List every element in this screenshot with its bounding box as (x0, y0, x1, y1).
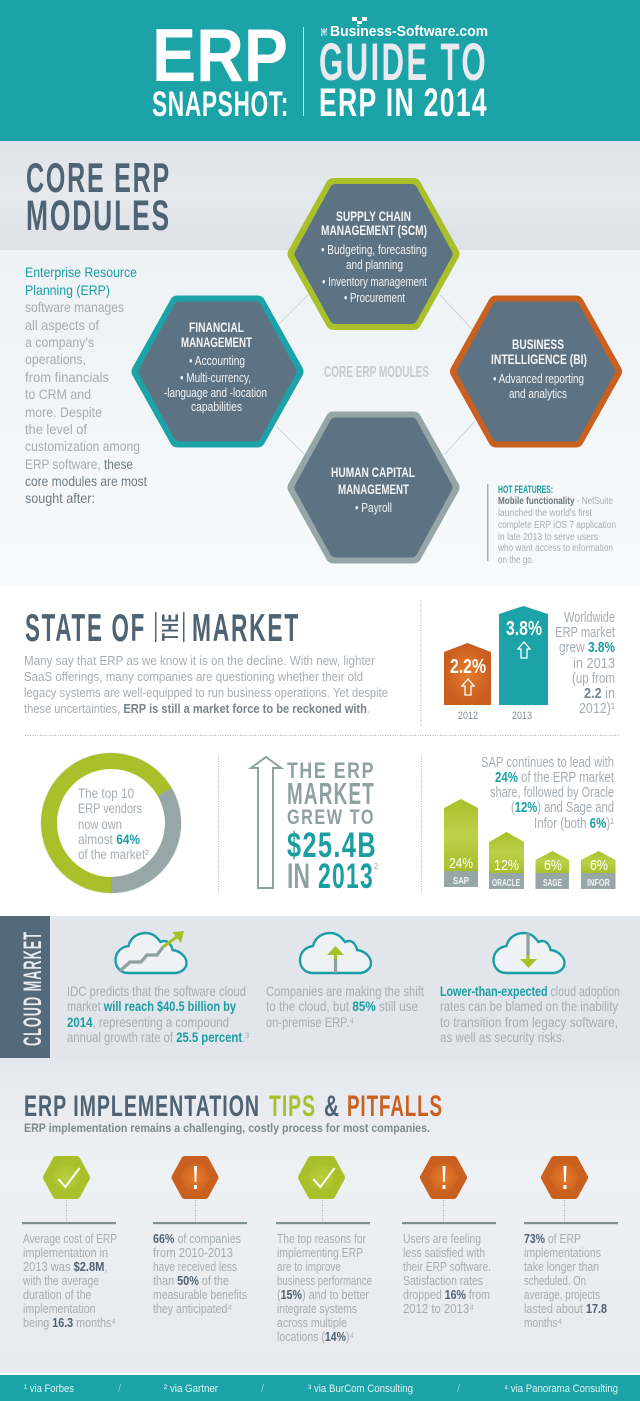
callout: market grew to 25.4B: IN (287, 857, 310, 896)
hexagon: financial management (140, 304, 296, 440)
donut chart: top 10 vendors 64%: of the market² (78, 846, 149, 862)
pitfall: user satisfaction: Satisfaction rates (403, 1274, 483, 1288)
callout: market grew to 25.4B: $25.4B (287, 826, 377, 865)
heading: state of the market: STATE OF (25, 607, 146, 650)
donut chart: top 10 vendors 64% (40, 752, 182, 894)
hexagon: business intelligence: • Advanced reporting (493, 371, 584, 386)
pitfall: measurable benefits: from 2010-2013 (153, 1246, 233, 1260)
bar: Sage: 6% (544, 857, 562, 874)
text block: IDC prediction: market will reach $40.5 billion by (67, 998, 236, 1014)
bar chart: ERP market growth (444, 606, 616, 722)
tip: reasons for implementing: implementing ERP (277, 1246, 363, 1260)
text block: low adoption: Lower-than-expected cloud adoption (440, 983, 620, 999)
heading: cloud market: CLOUD MARKET (19, 931, 47, 1046)
tip: reasons for implementing: are to improve (277, 1260, 341, 1274)
footer: sources: ² via Gartner (164, 1383, 218, 1395)
callout: hot features: launched the world's first (498, 508, 592, 519)
logo: Business-Software.com: Business-Software.com (330, 23, 488, 40)
hexagon: business intelligence (458, 304, 614, 440)
bar: Infor: INFOR (587, 878, 611, 889)
text block: IDC prediction: 2014, representing a compound (67, 1014, 229, 1030)
text block: ERP intro: all aspects of (25, 317, 99, 333)
text block: market intro: SaaS offerings, many companies are questioning whether their old (24, 669, 363, 684)
text block: ERP intro: customization among (25, 438, 140, 454)
hexagon: financial management: -language and -location (164, 385, 267, 400)
text block: ERP intro: operations, (25, 351, 86, 367)
arrow: market growth (251, 757, 281, 888)
bar: 2013 (499, 606, 548, 722)
tip: reasons for implementing: (15%) and to better (277, 1288, 369, 1302)
hexagon: supply chain management: MANAGEMENT (SCM) (321, 222, 427, 238)
footer: sources: ¹ via Forbes (24, 1383, 74, 1395)
bar: Sage (536, 851, 569, 889)
icon: cloud with down arrow (494, 933, 564, 973)
callout: hot features: complete ERP iOS 7 application (498, 520, 616, 531)
callout: hot features: who want access to information (497, 543, 613, 554)
title: ERP Snapshot: SNAPSHOT: (152, 85, 289, 124)
bar: Oracle (489, 832, 524, 889)
tip: average cost: implementation in (23, 1246, 108, 1260)
panel: state of the market (0, 585, 640, 917)
text block: market intro: Many say that ERP as we know it is on the decline. With new, lighter (24, 653, 376, 668)
tip: reasons for implementing: integrate systems (277, 1302, 357, 1316)
hexagon: financial management: • Accounting (189, 353, 245, 368)
hexagon: business intelligence: INTELLIGENCE (BI) (491, 351, 587, 367)
heading: state of the market: MARKET (192, 607, 300, 650)
logo: Business-Software.com (320, 17, 488, 40)
callout: hot features: on the go. (498, 555, 534, 566)
hexagon: financial management: MANAGEMENT (181, 334, 252, 350)
bar: Sage: SAGE (543, 878, 562, 889)
panel: core ERP modules (0, 141, 640, 585)
heading: core ERP modules: MODULES (26, 192, 171, 240)
pitfall: measurable benefits: than 50% of the (153, 1274, 229, 1288)
text block: ERP intro: core modules are most (25, 473, 147, 489)
pitfall: longer than scheduled: take longer than (524, 1260, 599, 1274)
text block: SAP market share: 24% of the ERP market (495, 769, 615, 786)
bar: SAP: 24% (449, 855, 473, 872)
text block: worldwide growth: grew 3.8% (559, 639, 615, 656)
bar: 2012: 2.2% (450, 656, 486, 678)
callout: market grew to 25.4B: 2 (374, 862, 378, 871)
bar: SAP (444, 799, 478, 887)
callout: market grew to 25.4B: THE ERP (287, 758, 375, 783)
text block: ERP intro: Planning (ERP) (25, 282, 110, 298)
pitfall: user satisfaction: Users are feeling (403, 1232, 481, 1246)
pitfall: longer than scheduled: months⁴ (524, 1316, 562, 1330)
text block: ERP intro: the level of (25, 421, 87, 437)
text block: worldwide growth (555, 609, 616, 717)
hexagon: financial management: capabilities (191, 399, 242, 414)
text block: market intro (24, 653, 388, 716)
subheading: ERP implementation remains a challenging, costly process for most companies. (24, 1121, 430, 1135)
callout: hot features: Mobile functionality - NetSuite (498, 496, 613, 507)
callout: market grew to 25.4B (287, 758, 378, 896)
pitfall: user satisfaction (402, 1160, 496, 1316)
text block: IDC prediction: IDC predicts that the software cloud (67, 983, 246, 999)
pitfall: longer than scheduled (524, 1160, 618, 1330)
heading: state of the market: THE (157, 613, 183, 641)
icon: cloud with up arrow (300, 933, 371, 973)
tip: average cost: being 16.3 months⁴ (23, 1316, 116, 1330)
text block: ERP intro: software manages (25, 299, 124, 315)
text block: ERP intro: ERP software, these (25, 456, 133, 472)
text block: ERP intro: from financials (25, 369, 109, 385)
pitfall: longer than scheduled: average, projects (524, 1288, 600, 1302)
pitfall: longer than scheduled: implementations (524, 1246, 601, 1260)
donut chart: top 10 vendors 64%: now own (78, 816, 122, 832)
hexagon: supply chain management: • Inventory management (322, 274, 427, 289)
text block: ERP intro: sought after: (25, 490, 95, 506)
bar: 2012 (444, 643, 491, 722)
text block: IDC prediction: annual growth rate of 25.5 percent.³ (67, 1029, 249, 1045)
tip: reasons for implementing: business performance (277, 1274, 372, 1288)
pitfall: measurable benefits: have received less (153, 1260, 237, 1274)
pitfall: longer than scheduled: scheduled. On (524, 1274, 586, 1288)
title: Guide to ERP in 2014: GUIDE TO (319, 33, 488, 92)
bar: 2012: 2012 (458, 710, 478, 722)
text block: shift to the cloud: on-premise ERP.⁴ (266, 1014, 354, 1030)
icon: cloud with rising chart (116, 931, 186, 973)
pitfall: user satisfaction: their ERP software. (403, 1260, 491, 1274)
donut chart: top 10 vendors 64%: ERP vendors (78, 800, 142, 816)
footer: sources: / (118, 1383, 122, 1395)
footer: sources: ⁴ via Panorama Consulting (504, 1383, 618, 1395)
pitfall: user satisfaction: dropped 16% from (403, 1288, 490, 1302)
pitfall: measurable benefits: measurable benefits (153, 1288, 247, 1302)
callout: hot features: in late 2013 to serve users (498, 532, 598, 543)
tip: reasons for implementing: locations (14%)⁴ (277, 1330, 354, 1344)
text block: worldwide growth: ERP market (555, 624, 616, 641)
bar: Oracle: 12% (494, 857, 519, 874)
callout: hot features: HOT FEATURES: (498, 484, 553, 496)
panel: cloud market (0, 916, 640, 1058)
pitfall: measurable benefits: 66% of companies (153, 1232, 241, 1246)
text block: worldwide growth: in 2013 (573, 655, 615, 672)
footer: sources: / (261, 1383, 265, 1395)
title: ERP Snapshot (152, 13, 289, 124)
tip: reasons for implementing: The top reasons for (277, 1232, 366, 1246)
text block: SAP market share: Infor (both 6%)¹ (534, 815, 614, 832)
bar: Infor: 6% (590, 857, 608, 874)
text block: ERP intro: to CRM and (25, 386, 91, 402)
hexagon: financial management: • Multi-currency, (180, 370, 251, 385)
text block: worldwide growth: (up from (572, 670, 615, 687)
hexagon: supply chain management: • Budgeting, forecasting (321, 242, 427, 257)
text block: shift to the cloud (266, 983, 424, 1030)
heading: tips and pitfalls: PITFALLS (347, 1090, 443, 1123)
tip: average cost: 2013 was $2.8M, (23, 1260, 108, 1274)
tip: average cost: implementation (23, 1302, 96, 1316)
donut chart: top 10 vendors 64%: almost 64% (78, 831, 140, 847)
panel: implementation tips and pitfalls (0, 1058, 640, 1374)
text block: ERP intro: Enterprise Resource (25, 264, 137, 280)
text block: ERP intro: a company's (25, 334, 94, 350)
footer: sources: ³ via BurCom Consulting (308, 1383, 413, 1395)
heading: tips and pitfalls: ERP IMPLEMENTATION (24, 1090, 260, 1123)
bar: Infor (581, 851, 616, 889)
tip: average cost (22, 1160, 117, 1330)
callout: market grew to 25.4B: GREW TO (287, 806, 375, 829)
tip: average cost: with the average (22, 1274, 99, 1288)
hexagon: supply chain management (296, 186, 452, 322)
text block: ERP intro (25, 264, 147, 506)
pitfall: longer than scheduled: 73% of ERP (524, 1232, 581, 1246)
text block: IDC prediction (67, 983, 249, 1045)
hexagon: human capital management: • Payroll (355, 500, 392, 515)
tip: average cost: duration of the (23, 1288, 92, 1302)
pitfall: longer than scheduled: lasted about 17.8 (524, 1302, 607, 1316)
bar: Oracle: ORACLE (492, 878, 520, 889)
hexagon: supply chain management: and planning (346, 257, 403, 272)
text block: worldwide growth: Worldwide (564, 609, 615, 626)
label: core ERP modules: CORE ERP MODULES (324, 364, 429, 381)
hexagon: financial management: FINANCIAL (189, 319, 244, 335)
callout: market grew to 25.4B: MARKET (287, 776, 375, 811)
bar chart: vendor market share (444, 799, 616, 889)
heading: core ERP modules: CORE ERP (26, 154, 171, 201)
text block: shift to the cloud: Companies are making the shift (266, 983, 424, 999)
callout: market grew to 25.4B: 2013 (318, 857, 374, 896)
donut chart: top 10 vendors 64%: The top 10 (78, 785, 134, 801)
hexagon: human capital management: HUMAN CAPITAL (331, 464, 415, 480)
title: ERP Snapshot: ERP (152, 13, 288, 97)
text block: low adoption: as well as security risks. (440, 1029, 565, 1045)
text block: market intro: legacy systems are well-equipped to run business operations. Yet despite (24, 685, 388, 700)
header banner (0, 0, 640, 141)
heading: tips and pitfalls: & (324, 1090, 339, 1123)
tip: average cost: Average cost of ERP (23, 1232, 117, 1246)
callout: hot features (487, 484, 616, 566)
title: Guide to ERP in 2014 (319, 33, 488, 125)
heading: core ERP modules (26, 154, 171, 240)
hexagon: human capital management: MANAGEMENT (338, 481, 409, 497)
text block: low adoption (440, 983, 620, 1045)
hexagon: business intelligence: and analytics (509, 386, 567, 401)
hexagon: business intelligence: BUSINESS (512, 336, 564, 352)
footer: sources: / (457, 1383, 461, 1395)
pitfall: measurable benefits (153, 1160, 247, 1316)
pitfall: user satisfaction: less satisfied with (403, 1246, 485, 1260)
bar: 2013: 2013 (512, 710, 532, 722)
heading: tips and pitfalls: TIPS (269, 1090, 316, 1123)
bar: 2013: 3.8% (506, 618, 542, 640)
pitfall: user satisfaction: 2012 to 2013⁴ (403, 1302, 474, 1316)
text block: market intro: these uncertainties, ERP is still a market force to be reckoned with. (24, 701, 370, 716)
tip: reasons for implementing (276, 1160, 372, 1344)
text block: shift to the cloud: to the cloud, but 85% still use (266, 998, 418, 1014)
text block: worldwide growth: 2012)¹ (579, 700, 615, 717)
tip: reasons for implementing: across multiple (277, 1316, 347, 1330)
bar: SAP: SAP (453, 876, 469, 887)
text block: SAP market share: (12%) and Sage and (511, 799, 614, 816)
footer: sources (0, 1373, 640, 1401)
pitfall: measurable benefits: they anticipated⁴ (153, 1302, 232, 1316)
hexagon: supply chain management: • Procurement (344, 290, 405, 305)
hexagon: human capital management (296, 420, 452, 556)
text block: worldwide growth: 2.2 in (584, 685, 615, 702)
text block: ERP intro: more. Despite (25, 404, 102, 420)
hexagon: supply chain management: SUPPLY CHAIN (336, 208, 411, 224)
title: Guide to ERP in 2014: ERP IN 2014 (319, 81, 488, 125)
logo: Business-Software.com: THE (320, 28, 329, 36)
text block: SAP market share (481, 754, 615, 832)
